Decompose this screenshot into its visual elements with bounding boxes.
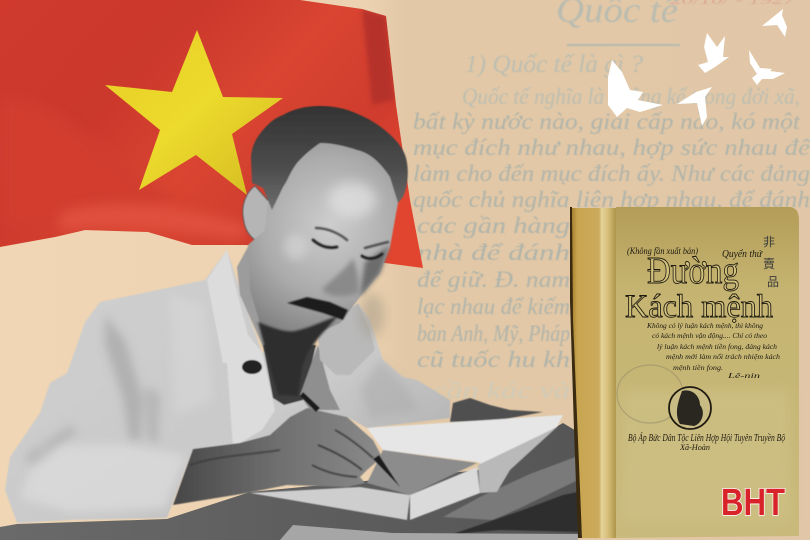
folder on desk [443, 456, 578, 520]
birds [608, 9, 787, 126]
cover text: lý luận kách mệnh tiền fong, đảng kách [657, 343, 778, 351]
cover text [625, 246, 785, 452]
neck shadow [360, 293, 384, 337]
button [242, 360, 262, 374]
gray lower page [367, 450, 477, 495]
handwritten manuscript: để giữ. Đ. nam [417, 267, 570, 292]
cover text: Lê-nin [726, 372, 761, 380]
shirt opening [263, 345, 316, 405]
bird 4 [749, 50, 785, 85]
Vietnamese flag [0, 0, 423, 268]
handwritten manuscript: mục đích như nhau, hợp sức nhau để [413, 135, 810, 160]
cover text: Quyển thứ [722, 249, 763, 260]
book [250, 415, 563, 520]
handwritten manuscript: làm cho đến mục đích ấy. Như các đảng [413, 161, 810, 186]
cover text: mệnh tiền fong. [673, 364, 723, 372]
cover text: (Không fần xuất bản) [627, 246, 698, 257]
forehead highlight [328, 182, 376, 218]
nose shadow [322, 258, 359, 296]
BHT logo: BHT [721, 482, 785, 524]
beard [258, 316, 338, 396]
bird 3 [698, 33, 729, 73]
emblem [669, 387, 711, 429]
book upper page [367, 415, 563, 465]
flag star [105, 30, 283, 195]
pen [300, 392, 400, 487]
spine [572, 208, 617, 538]
hair [251, 106, 408, 210]
faint stamp [617, 365, 683, 423]
handwritten manuscript: bàn Anh, Mỹ, Pháp [417, 321, 570, 346]
cover text: Không có lý luận kách mệnh, thì không [646, 322, 764, 330]
ear [243, 186, 272, 240]
writing arm and hand [173, 408, 382, 505]
desk [0, 423, 578, 540]
handwritten manuscript: các gần hàng [417, 213, 570, 238]
bird 1 [608, 60, 663, 117]
striped shirt [300, 345, 340, 410]
handwritten manuscript: quốc chủ nghĩa liên hợp nhau, để đánh [413, 187, 810, 212]
collar and placket [207, 250, 275, 447]
handwritten manuscript: nhà để đánh [417, 240, 570, 265]
head [243, 106, 408, 396]
handwritten manuscript: lạc nhau để kiếm [417, 294, 570, 319]
jaw shadow [360, 245, 390, 297]
bird 5 [762, 9, 787, 37]
handwritten manuscript [413, 0, 810, 403]
jacket [5, 250, 450, 523]
bird 2 [677, 87, 712, 126]
eyes and brows [313, 228, 388, 258]
book edge [410, 467, 480, 520]
handwritten manuscript: cũ tuốc hu kh [417, 347, 570, 372]
vertical stamp 非賣品: 賣 [763, 255, 775, 272]
vertical stamp 非賣品 [763, 233, 779, 290]
cover light patch [622, 390, 790, 520]
cheek highlight [284, 234, 308, 260]
portrait: man writing [5, 106, 563, 523]
handwritten manuscript: 1) Quốc tế là gì ? [465, 51, 643, 78]
vertical stamp 非賣品: 非 [763, 233, 775, 250]
cover [616, 207, 799, 538]
lower left page [250, 487, 410, 520]
cover text: Xã-Hoàn [679, 442, 710, 452]
dark shadow on desk [453, 492, 578, 534]
handwritten manuscript: bất kỳ nước nào, giai cấp nào, kó một [413, 109, 801, 134]
book edge [570, 207, 582, 538]
moustache [287, 297, 348, 320]
neck [237, 243, 300, 370]
cover text: Đường [647, 250, 739, 292]
face [248, 140, 398, 350]
jacket shading [20, 295, 420, 512]
cover text: Kách mệnh [625, 289, 773, 325]
book: Đường Kách mệnh [570, 207, 799, 538]
right collar [318, 303, 375, 375]
handwritten manuscript: cần kác và [432, 378, 570, 403]
back page edges [478, 427, 557, 493]
paper on desk [280, 525, 578, 540]
vertical stamp 非賣品: 品 [767, 273, 779, 290]
cover text: mệnh mới làm nổi trách nhiệm kách [666, 353, 781, 361]
cover text: có kách mệnh vận động.... Chỉ có theo [652, 332, 768, 340]
left hand on book [450, 398, 543, 422]
